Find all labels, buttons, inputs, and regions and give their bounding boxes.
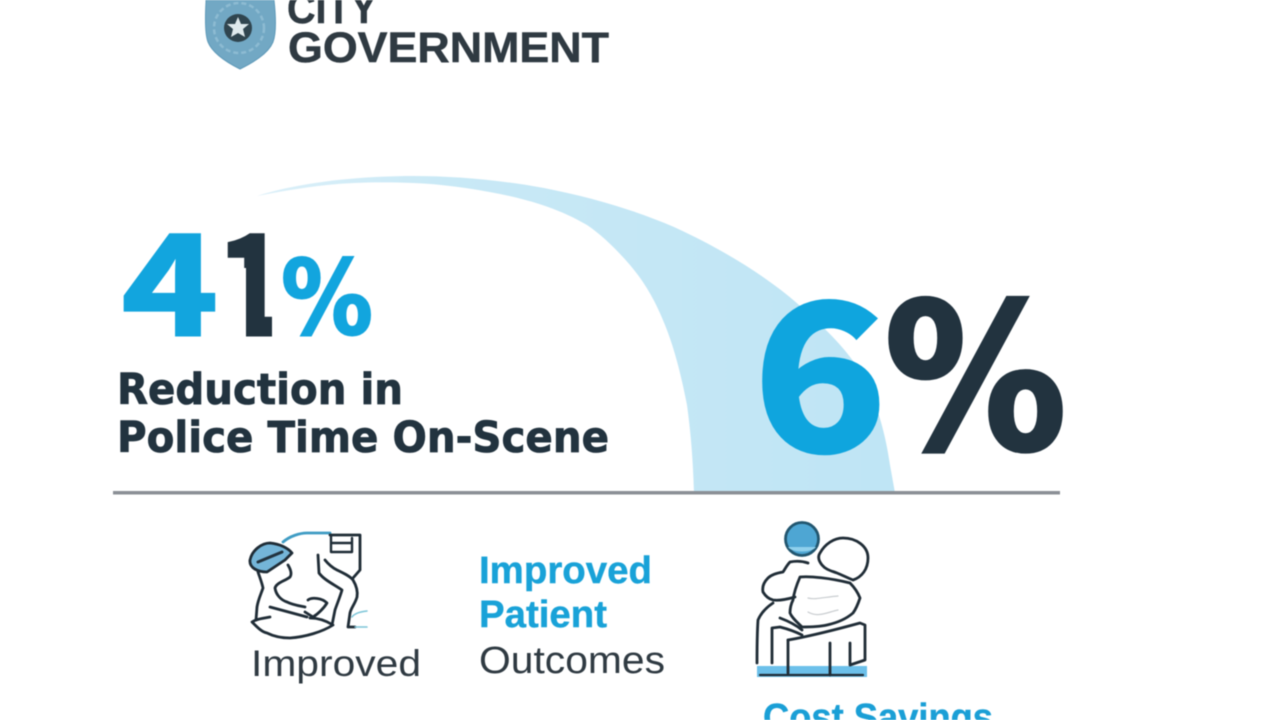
text: reduction in police time on-scene: Reduction in [117,365,403,415]
icon: police badge logo [205,0,275,69]
statistic: 6% [754,217,1067,509]
statistic: 41% [122,232,372,338]
label: improved patient outcomes [479,550,665,682]
statistic: 41%: 1 [216,175,288,376]
logo wordmark: GOVERNMENT [288,24,609,72]
statistic: 6%: 6 [754,217,886,509]
icon: patient care illustration [250,533,367,638]
text: reduction in police time on-scene: Police Time On-Scene [117,413,609,463]
label: improved: Improved [251,643,421,684]
icon: caregiver and patient illustration [757,522,868,677]
divider line [113,491,1060,494]
logo wordmark [287,0,609,72]
decorative arc connecting 41% to 6% [257,176,895,493]
statistic: 41%: % [281,239,373,359]
text: reduction in police time on-scene [117,365,609,463]
label: improved patient outcomes: Outcomes [479,640,665,682]
statistic: 6%: % [884,261,1067,498]
statistic: 41%: 4 [122,175,218,376]
label: improved patient outcomes: Improved [479,550,652,592]
label: improved patient outcomes: Patient [479,594,607,636]
